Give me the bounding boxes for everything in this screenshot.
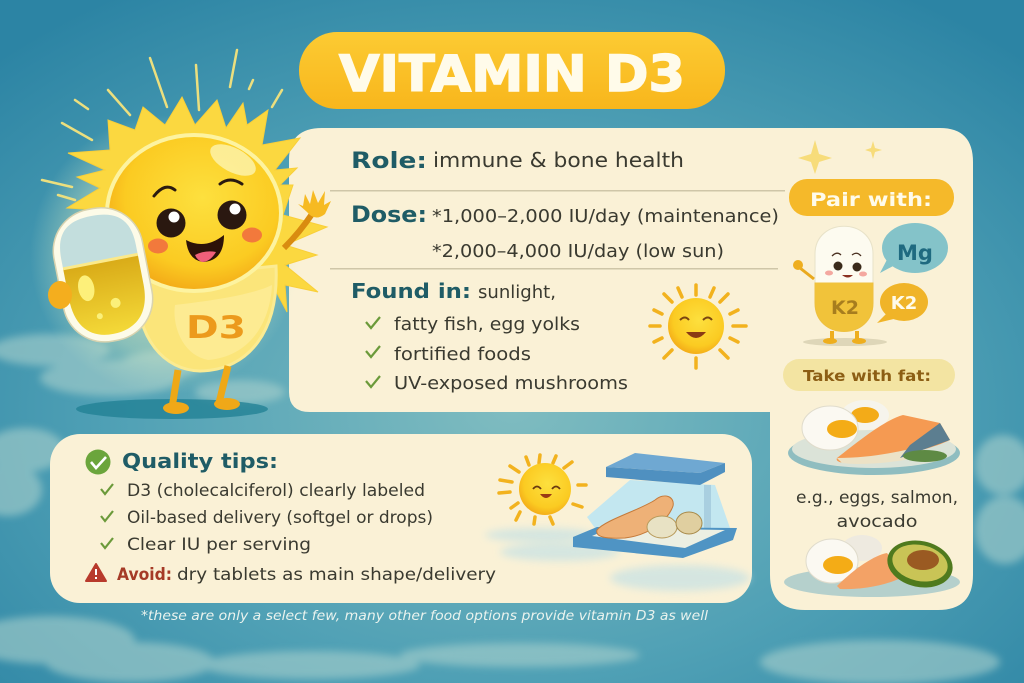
held softgel xyxy=(46,200,160,349)
title banner xyxy=(299,32,725,109)
icon: K2 capsule mascot with bubbles: K2 xyxy=(831,297,859,319)
capsule body xyxy=(137,266,276,371)
found in list: sunlight, xyxy=(478,282,556,303)
found in list xyxy=(351,279,628,394)
avoid warning xyxy=(86,564,496,584)
icon: K2 capsule mascot with bubbles xyxy=(793,223,948,346)
avoid warning: dry tablets as main shape/delivery xyxy=(177,565,496,584)
face xyxy=(148,180,262,262)
hand xyxy=(48,281,72,309)
take with fat badge: Take with fat: xyxy=(803,367,931,385)
dose text xyxy=(351,203,779,262)
icon: plate with eggs and salmon xyxy=(788,400,960,475)
icon: K2 capsule mascot with bubbles: Mg xyxy=(897,241,933,265)
food examples text: avocado xyxy=(836,512,918,531)
tips list xyxy=(101,481,433,554)
food examples text xyxy=(796,488,958,531)
found in list: Found in: xyxy=(351,279,471,303)
sun rays xyxy=(67,97,327,312)
title banner: VITAMIN D3 xyxy=(339,45,685,103)
dose text: *1,000–2,000 IU/day (maintenance) xyxy=(432,206,779,227)
shadow under mascot xyxy=(76,399,268,419)
panel: quality tips xyxy=(50,434,752,603)
icon: plate with eggs, salmon, avocado xyxy=(784,535,960,597)
pair with badge xyxy=(789,179,954,216)
icon: UV lamp with mushrooms and food xyxy=(573,453,737,558)
found in list: fortified foods xyxy=(394,344,531,365)
legs and feet xyxy=(172,370,178,408)
quality tips heading: Quality tips: xyxy=(122,449,278,473)
sun head xyxy=(105,133,283,293)
quality tips heading xyxy=(86,449,278,474)
food examples text: e.g., eggs, salmon, xyxy=(796,488,958,507)
icon: K2 capsule mascot with bubbles: K2 xyxy=(891,293,917,314)
avoid warning: Avoid: xyxy=(117,565,172,584)
capsule D3 text: D3 xyxy=(186,310,246,346)
main cream panel xyxy=(289,128,973,610)
footnote: *these are only a select few, many other food options provide vitamin D3 as well xyxy=(141,608,708,624)
pair with badge: Pair with: xyxy=(810,189,932,211)
found in list: UV-exposed mushrooms xyxy=(394,373,628,394)
dose text: *2,000–4,000 IU/day (low sun) xyxy=(432,241,724,262)
take with fat badge xyxy=(783,359,955,391)
found in list: fatty fish, egg yolks xyxy=(394,314,580,335)
role text xyxy=(351,148,684,174)
sparkles xyxy=(798,140,882,174)
mascot: sun capsule holding a softgel xyxy=(30,50,331,419)
tips list: Clear IU per serving xyxy=(127,535,311,554)
waving arm xyxy=(284,214,312,248)
role text: Role: xyxy=(351,149,427,174)
icon: sun beside UV lamp xyxy=(499,455,586,524)
dose text: Dose: xyxy=(351,203,427,228)
tips list: D3 (cholecalciferol) clearly labeled xyxy=(127,481,425,500)
icon: smiling sun xyxy=(650,285,746,368)
clouds in panel xyxy=(485,528,750,591)
role text: immune & bone health xyxy=(433,148,684,172)
tips list: Oil-based delivery (softgel or drops) xyxy=(127,508,433,527)
D3 label patch xyxy=(174,285,272,360)
